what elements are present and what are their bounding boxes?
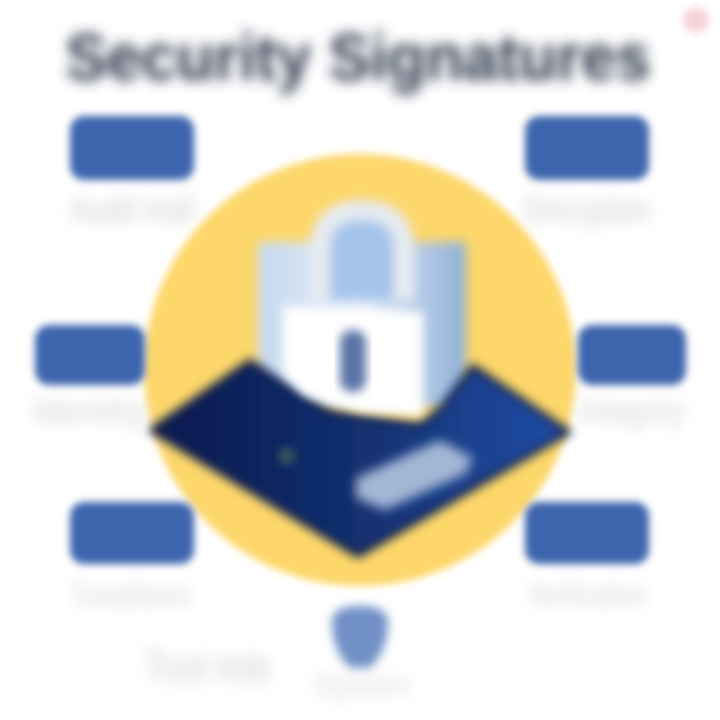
badge — [578, 325, 686, 385]
keyhole — [340, 330, 366, 392]
panel: middle right — [578, 325, 686, 431]
caption: Integrity — [580, 390, 684, 431]
shield backdrop — [258, 242, 466, 407]
central illustration — [144, 154, 576, 586]
padlock shackle — [320, 210, 404, 300]
padlock body — [283, 306, 423, 416]
panel: top left — [70, 116, 194, 231]
caption: Audit trail — [70, 189, 194, 231]
caption: Verification — [528, 576, 648, 614]
bottom centre note: Signature — [314, 666, 410, 704]
icon: bottom shield — [332, 606, 388, 668]
caption: Encryption — [526, 189, 650, 231]
caption: Compliance — [72, 576, 192, 614]
panel: middle left — [32, 325, 148, 431]
badge — [525, 116, 649, 180]
badge — [70, 116, 194, 180]
chip dot — [278, 447, 296, 465]
padlock — [283, 210, 423, 416]
badge — [70, 502, 194, 564]
badge — [35, 325, 145, 385]
corner mark — [683, 7, 709, 33]
bottom left note: Trust note — [146, 640, 270, 692]
panel: bottom right — [525, 502, 649, 614]
card on platform — [356, 440, 473, 510]
title: Security Signatures — [66, 20, 650, 94]
panel: bottom left — [70, 502, 194, 614]
platform — [152, 362, 568, 555]
yellow circle — [144, 154, 576, 586]
panel: top right — [525, 116, 650, 231]
caption: Identity — [32, 390, 148, 431]
badge — [525, 502, 649, 564]
